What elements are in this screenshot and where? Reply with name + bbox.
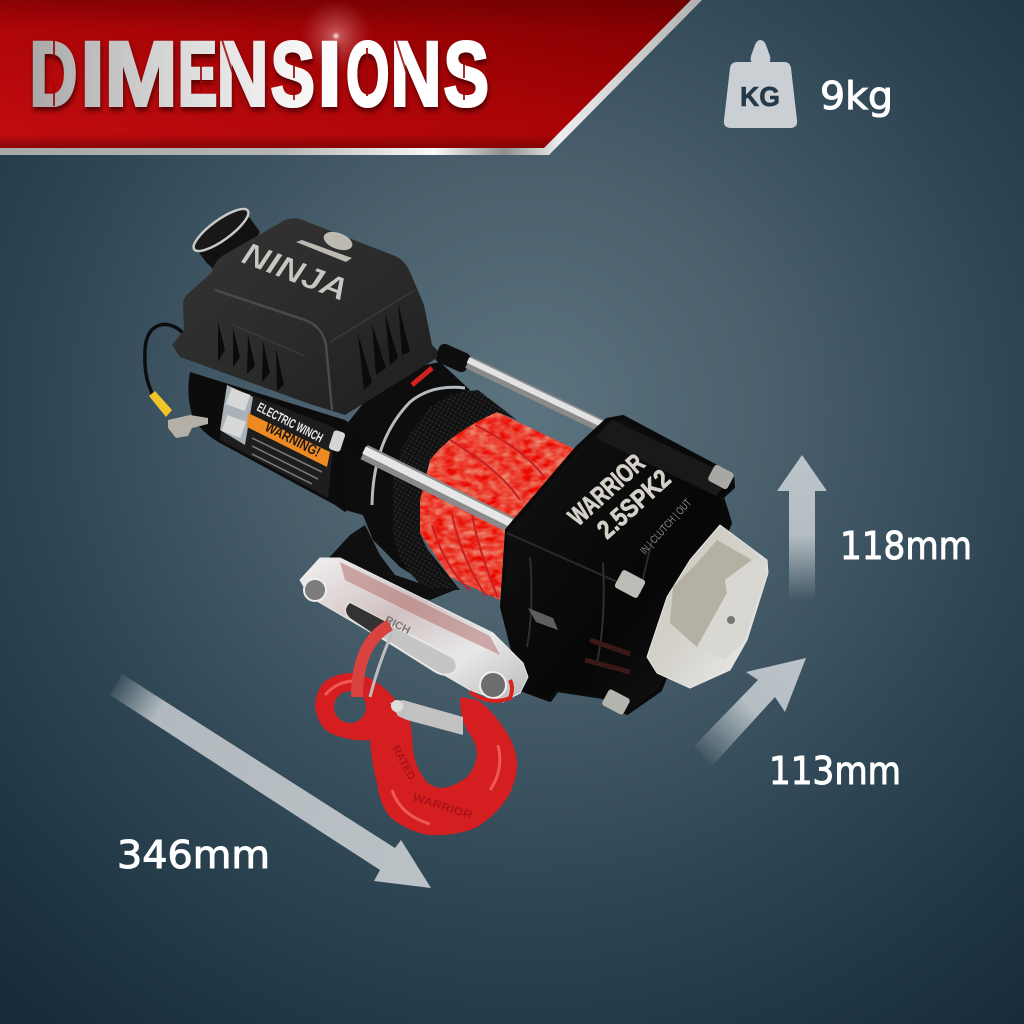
title: S <box>270 24 315 126</box>
icon: weight: KG <box>740 81 780 112</box>
motor cover <box>172 203 437 415</box>
title: M <box>104 24 178 126</box>
clutch marking: IN | CLUTCH | OUT <box>638 497 694 557</box>
winch <box>145 203 768 835</box>
flange ring <box>372 387 465 505</box>
title: I <box>318 24 342 126</box>
model name: WARRIOR <box>562 448 650 531</box>
rear tie rod <box>433 342 606 428</box>
title <box>30 24 489 126</box>
mount bracket <box>327 525 455 600</box>
gearbox <box>502 417 735 716</box>
thimble <box>370 633 392 697</box>
weight label: 9kg <box>820 74 893 118</box>
fairlead: RICH <box>383 614 412 637</box>
title: O <box>346 24 390 126</box>
title: D <box>30 24 78 126</box>
motor cylinder <box>188 372 375 512</box>
end cap <box>647 525 768 688</box>
hook: RATED <box>389 744 417 782</box>
height label: 118mm <box>840 524 972 568</box>
ground wire <box>145 324 208 438</box>
title: E <box>178 24 218 126</box>
motor cylinder: WARNING! <box>263 418 323 460</box>
rope strap <box>393 390 517 590</box>
end flange <box>342 362 470 590</box>
arrow: length <box>110 674 431 888</box>
logo: NINJA <box>237 235 353 308</box>
rope loop <box>357 625 390 697</box>
header banner <box>0 0 702 155</box>
front tie rod <box>328 424 511 525</box>
hook <box>315 673 517 835</box>
title: I <box>80 24 104 126</box>
arrow: width <box>694 658 806 766</box>
width label: 113mm <box>769 749 901 793</box>
rope drum <box>420 412 577 600</box>
gearbox: 2.5SPK2 <box>591 463 676 544</box>
hook: WARRIOR <box>411 791 474 822</box>
bolts <box>614 569 646 599</box>
title: N <box>216 24 268 126</box>
hook latch <box>390 700 463 735</box>
wire <box>412 368 432 385</box>
length label: 346mm <box>117 833 270 877</box>
rope tail <box>470 680 512 701</box>
title: S <box>444 24 489 126</box>
motor cylinder: ELECTRIC WINCH <box>255 399 326 445</box>
arrow: height <box>777 455 827 600</box>
title: N <box>390 24 442 126</box>
fairlead <box>300 558 528 702</box>
icon: weight <box>724 40 797 128</box>
